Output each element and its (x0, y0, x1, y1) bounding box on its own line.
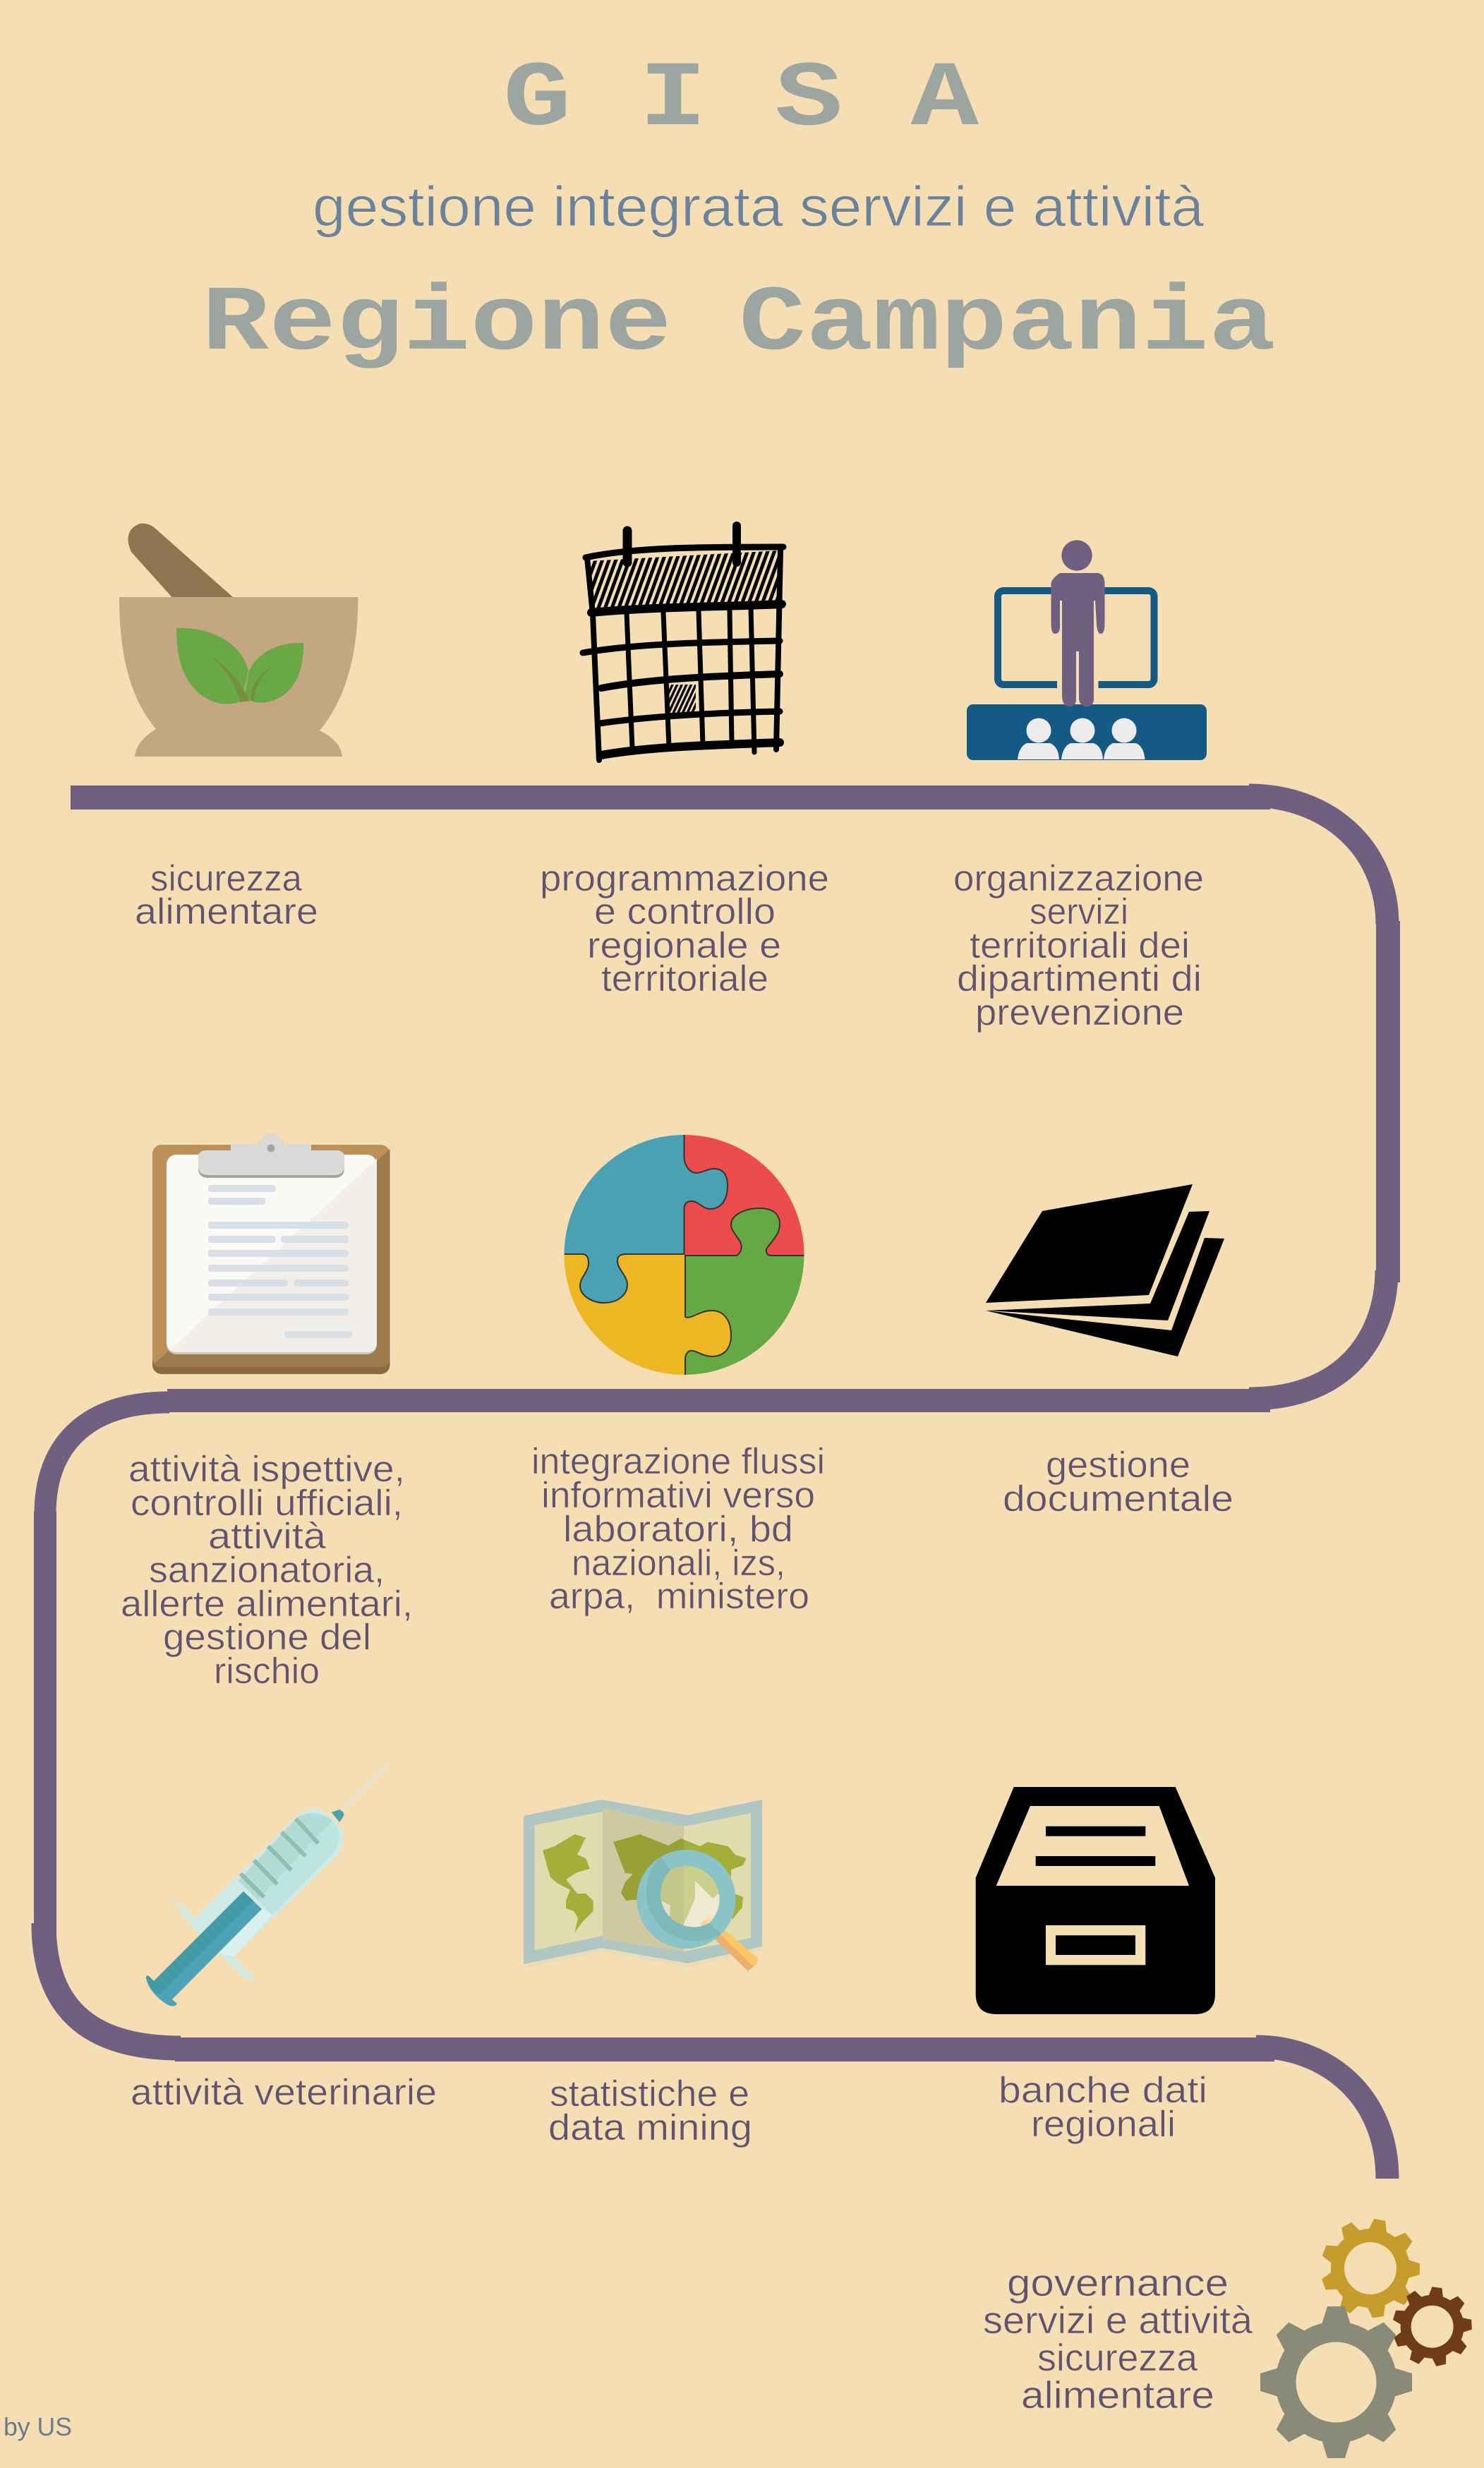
label: programmazione: regionale e (587, 925, 781, 966)
label: organizzazione: prevenzione (975, 992, 1184, 1033)
label: governance: alimentare (1021, 2374, 1214, 2416)
icon: syringe (146, 1766, 386, 2006)
icon: brown gear (1392, 2287, 1472, 2367)
label: programmazione: programmazione (540, 858, 829, 899)
label: attività ispettive: controlli ufficiali, (131, 1483, 403, 1524)
label: attività ispettive (121, 1449, 413, 1692)
connecting path (34, 785, 1400, 2179)
label: programmazione: e controllo (594, 891, 776, 932)
credit: by US (4, 2412, 72, 2441)
label: organizzazione: servizi (1030, 891, 1128, 932)
icon: clipboard (152, 1134, 390, 1374)
label: attività ispettive: sanzionatoria, (149, 1550, 385, 1591)
label: banche dati regionali: regionali (1031, 2104, 1176, 2145)
label: governance: sicurezza (1037, 2337, 1198, 2379)
label: integrazione flussi: integrazione flussi (531, 1441, 825, 1482)
label: attività ispettive: gestione del (163, 1617, 371, 1658)
label: banche dati regionali: banche dati (999, 2070, 1207, 2111)
label: attività ispettive: attività ispettive, (128, 1449, 405, 1490)
label: sicurezza alimentare (135, 858, 318, 932)
label: attività ispettive: allerte alimentari, (121, 1584, 413, 1625)
label: programmazione (540, 858, 829, 999)
label: statistiche e data mining: statistiche e (550, 2073, 749, 2114)
icon: map with magnifier (524, 1800, 762, 1971)
label: gestione documentale: gestione (1046, 1445, 1190, 1486)
label: integrazione flussi: arpa, ministero (549, 1576, 809, 1617)
label: statistiche e data mining (548, 2073, 752, 2148)
label: governance: governance (1007, 2262, 1229, 2304)
label: gestione documentale: documentale (1003, 1479, 1233, 1519)
label: attività ispettive: rischio (214, 1651, 320, 1692)
label: attività veterinarie: attività veterinarie (131, 2072, 437, 2113)
label: governance (983, 2262, 1253, 2416)
label: governance: servizi e attività (983, 2299, 1253, 2342)
label: attività ispettive: attività (208, 1516, 326, 1557)
label: statistiche e data mining: data mining (548, 2107, 752, 2148)
label: integrazione flussi: informativi verso (541, 1475, 815, 1516)
label: programmazione: territoriale (601, 958, 768, 999)
icon: grey gear (1260, 2306, 1412, 2458)
label: integrazione flussi: nazionali, izs, (572, 1543, 785, 1584)
label: sicurezza alimentare: sicurezza (150, 858, 302, 899)
subtitle: gestione integrata servizi e attività (313, 175, 1205, 238)
icon: presenter on stage (967, 540, 1207, 760)
label: organizzazione (953, 858, 1204, 1033)
icon: puzzle circle (564, 1134, 805, 1376)
label: banche dati regionali (999, 2070, 1207, 2145)
icon: gold gear (1320, 2218, 1420, 2318)
label: organizzazione: organizzazione (953, 858, 1204, 899)
label: integrazione flussi (531, 1441, 825, 1617)
label: organizzazione: dipartimenti di (957, 958, 1202, 999)
label: sicurezza alimentare: alimentare (135, 891, 318, 932)
icon: stacked documents (986, 1184, 1224, 1356)
title: GISA: G I S A (503, 48, 979, 152)
label: organizzazione: territoriali dei (970, 925, 1190, 966)
label: integrazione flussi: laboratori, bd (563, 1509, 793, 1550)
icon: archive box (976, 1787, 1215, 2014)
label: gestione documentale (1003, 1445, 1233, 1519)
title: Regione Campania: Regione Campania (202, 272, 1276, 377)
icon: mortar and pestle (119, 524, 358, 757)
icon: hand drawn calendar (583, 526, 783, 760)
